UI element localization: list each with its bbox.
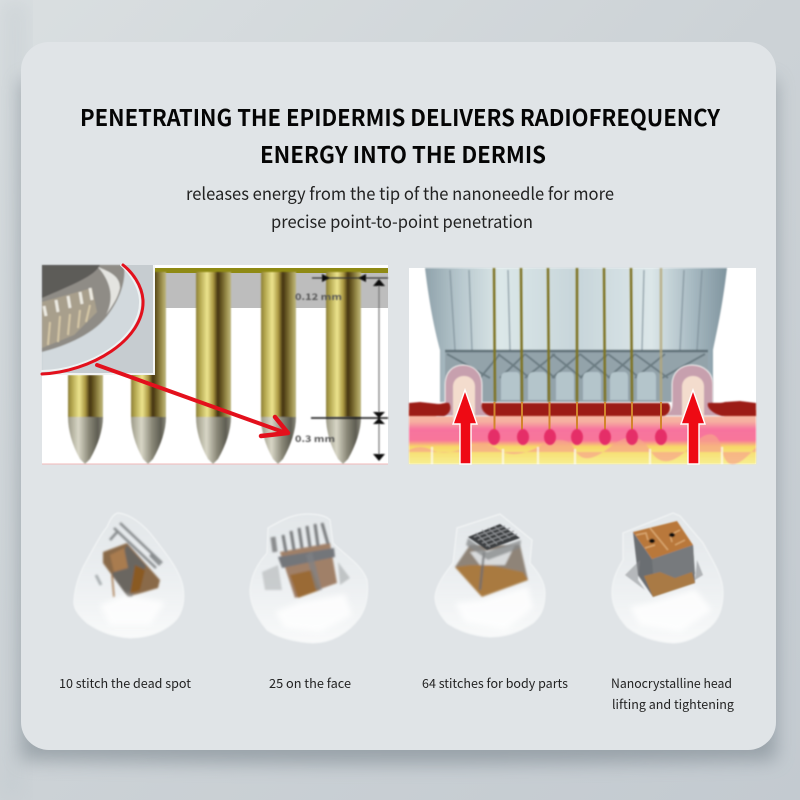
heading: ENERGY INTO THE DERMIS [260,136,546,170]
red callout arrow [42,265,288,436]
dermis band [409,401,756,416]
subheading text [186,180,614,233]
dimension marks [295,274,388,461]
arrow: left upward [453,390,477,464]
needle shafts and energy points [488,268,667,445]
skin layers [409,410,756,464]
caption: 64 stitches: 64 stitches for body parts [422,673,568,692]
inset photo of handpiece [42,265,155,375]
handpiece head [425,268,727,402]
dimension marks: 0.3 mm [295,432,335,445]
caption: nanocrystalline head [611,673,734,713]
left and right skin bumps [436,365,724,420]
heading: PENETRATING THE EPIDERMIS DELIVERS RADIOFREQUENCY [80,99,721,133]
caption: nanocrystalline head: lifting and tightening [612,694,734,713]
caption: nanocrystalline head: Nanocrystalline head [611,673,732,692]
caption: 10 stitch: 10 stitch the dead spot [59,673,191,692]
icon: nanocrystalline tip [612,513,723,643]
subheading text: releases energy from the tip of the nanoneedle for more [186,180,614,205]
icon: 25-pin tip [250,514,368,643]
panel: skin penetration diagram [409,268,756,464]
icon: 10-pin tip [74,513,184,638]
dimension marks: 0.12 mm [295,290,342,303]
needles [68,272,361,464]
caption: 25 on the face: 25 on the face [269,673,351,692]
panel: needle close-up image [42,265,388,464]
heading [80,99,721,170]
icon: 64-pin tip [435,514,545,637]
subheading text: precise point-to-point penetration [271,208,533,233]
arrow: right upward [681,390,705,464]
